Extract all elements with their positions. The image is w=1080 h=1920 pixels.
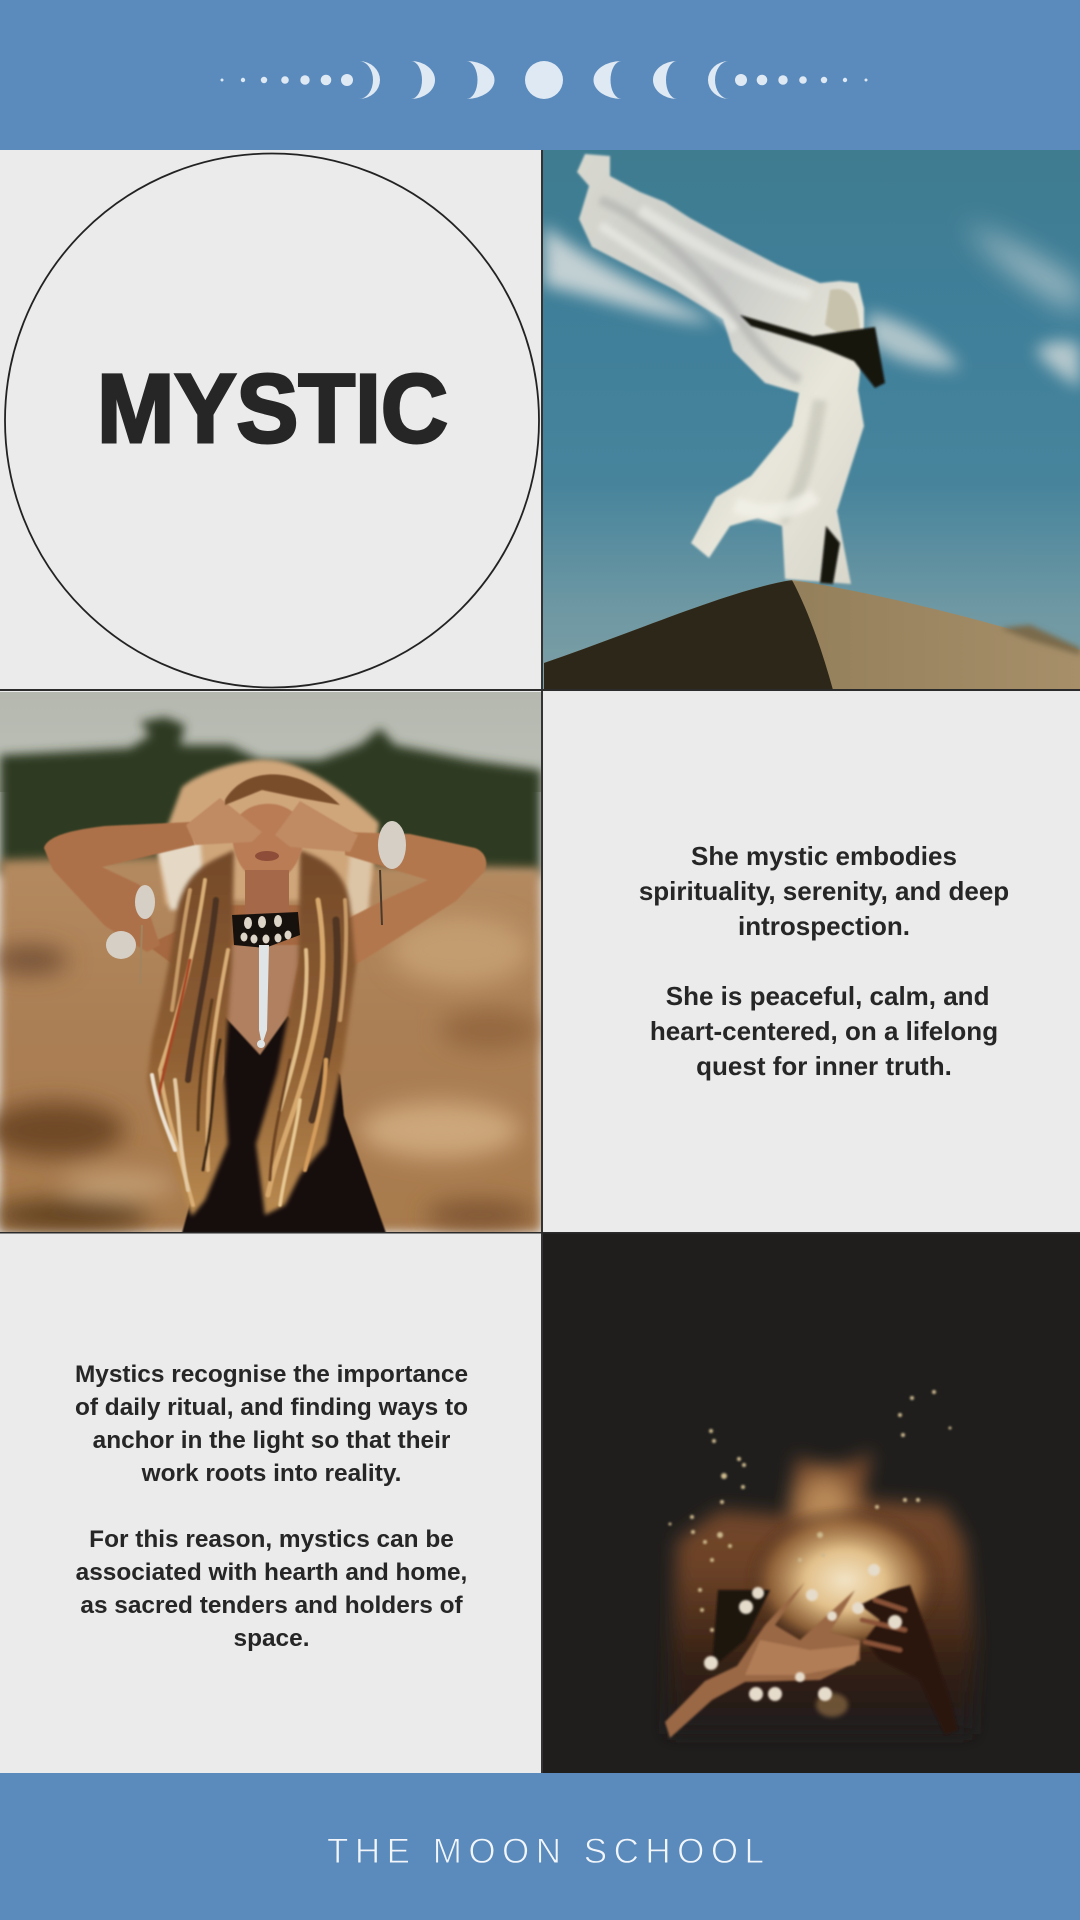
panel: description text left: space. — [234, 1625, 309, 1652]
panel: description text left: anchor in the light so that their — [93, 1427, 450, 1454]
photo: glowing lights held to a woman's chest — [543, 1234, 1080, 1773]
panel: description text right: heart-centered, on a lifelong — [650, 1016, 998, 1046]
panel: description text left: associated with hearth and home, — [76, 1559, 467, 1586]
panel: description text left: as sacred tenders and holders of — [80, 1592, 463, 1619]
chest glow — [745, 1505, 945, 1655]
panel: title circle — [4, 152, 540, 688]
shell necklace — [232, 912, 300, 948]
panel: description text left: work roots into reality. — [142, 1460, 401, 1487]
glitter dots — [668, 1390, 952, 1632]
white cloth figure — [577, 154, 885, 584]
dress — [182, 1016, 386, 1233]
face — [232, 804, 304, 882]
hair locks — [147, 850, 234, 1216]
leg — [820, 526, 840, 584]
pendant — [259, 945, 269, 1045]
panel: description text left: For this reason, mystics can be — [89, 1526, 454, 1553]
bokeh lights — [704, 1564, 902, 1701]
dark glitter patch — [712, 1590, 770, 1668]
body — [667, 1450, 975, 1734]
woman — [44, 760, 486, 1233]
left arm — [44, 822, 195, 952]
photo: woman with long hair covering her eyes in a field — [0, 692, 541, 1232]
right hand — [860, 1585, 958, 1735]
circle outline — [5, 154, 539, 688]
title: MYSTIC: MYSTIC — [97, 354, 448, 463]
field — [0, 855, 541, 1232]
lips — [255, 851, 279, 861]
torso skin — [147, 905, 354, 1016]
black arm — [740, 315, 885, 388]
hands — [186, 798, 262, 845]
field light and dark patches — [0, 915, 540, 1230]
left hand — [665, 1582, 958, 1738]
panel: description text left: Mystics recognise the importance — [75, 1361, 468, 1388]
panel: description text right — [639, 841, 1009, 1081]
forehead hair — [225, 774, 340, 805]
top band: moon phases — [0, 0, 1080, 150]
warm spark below hands — [816, 1693, 848, 1717]
right arm — [345, 832, 486, 966]
chest — [224, 945, 302, 1055]
panel: description text left: of daily ritual, and finding ways to — [75, 1394, 468, 1421]
footer band — [0, 1773, 1080, 1920]
dune — [544, 580, 1080, 690]
panel: description text right: introspection. — [738, 911, 910, 941]
panel: description text right: spirituality, serenity, and deep — [639, 876, 1009, 906]
neck glow — [797, 1475, 853, 1535]
sky — [543, 150, 1080, 690]
icon: moon phase row — [220, 61, 868, 99]
hair strands — [152, 880, 346, 1205]
pale back hair halo — [158, 760, 379, 925]
panel: description text left — [75, 1361, 468, 1652]
sky and trees — [0, 692, 541, 792]
footer text: THE MOON SCHOOL — [327, 1832, 764, 1871]
panel: description text right: quest for inner truth. — [696, 1051, 952, 1081]
panel: description text right: She is peaceful, calm, and — [666, 981, 989, 1011]
panel: description text right: She mystic embodies — [691, 841, 957, 871]
clouds — [544, 225, 1080, 388]
bracelets — [106, 821, 406, 959]
photo: figure in white cloth on a dune — [543, 150, 1080, 689]
